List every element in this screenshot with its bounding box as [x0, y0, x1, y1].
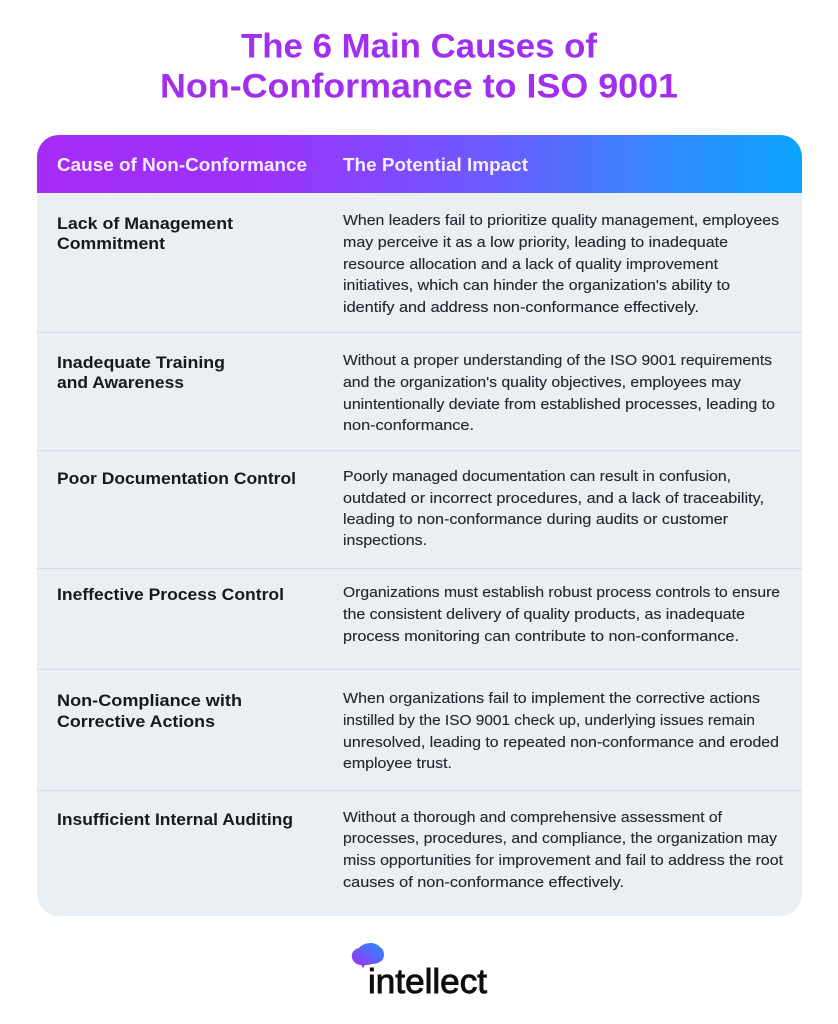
row: Non-Compliance with Corrective Actions [57, 691, 779, 772]
row: Insufficient Internal Auditing: processes, procedures, and compliance, the organization may [343, 831, 778, 847]
title: The 6 Main Causes of [241, 28, 598, 66]
row: Inadequate Training and Awareness: unintentionally deviate from established processes, leading to [343, 397, 775, 413]
table header: Cause of Non-Conformance [57, 155, 307, 175]
table header [37, 135, 802, 193]
row: Non-Compliance with Corrective Actions: unresolved, leading to repeated non-conformance and eroded [343, 735, 779, 751]
row: Insufficient Internal Auditing: causes of non-conformance effectively. [343, 875, 624, 891]
row: Ineffective Process Control: Organizations must establish robust process controls to ensure [343, 585, 780, 601]
row: Insufficient Internal Auditing: miss opportunities for improvement and fail to address the root [343, 853, 783, 869]
icon: cloud speech bubble [352, 943, 384, 968]
row: Lack of Management Commitment: initiatives, which can hinder the organization's ability to [343, 278, 730, 294]
row: Insufficient Internal Auditing: Insufficient Internal Auditing [57, 810, 293, 829]
row: Non-Compliance with Corrective Actions: When organizations fail to implement the corrective actions [343, 691, 760, 707]
row: Non-Compliance with Corrective Actions: instilled by the ISO 9001 check up, underlying issues remain [343, 713, 755, 729]
row: Lack of Management Commitment: identify and address non-conformance effectively. [343, 300, 699, 316]
logo: intellect [352, 943, 488, 1001]
row: Lack of Management Commitment [57, 213, 779, 316]
row: Insufficient Internal Auditing [57, 810, 783, 891]
row: Non-Compliance with Corrective Actions: Non-Compliance with [57, 691, 242, 710]
row: Poor Documentation Control: outdated or incorrect procedures, and a lack of traceability, [343, 491, 764, 507]
row: Insufficient Internal Auditing: Without a thorough and comprehensive assessment of [343, 810, 723, 826]
row: Lack of Management Commitment: resource allocation and a lack of quality improvement [343, 257, 718, 273]
row: Inadequate Training and Awareness: and Awareness [57, 373, 184, 392]
row: Poor Documentation Control [57, 469, 764, 549]
row: Ineffective Process Control: process monitoring can contribute to non-conformance. [343, 629, 739, 645]
table header: The Potential Impact [343, 155, 528, 175]
row: Ineffective Process Control [57, 585, 780, 645]
title: Non-Conformance to ISO 9001 [160, 68, 678, 106]
panel: table [37, 135, 802, 916]
row: Lack of Management Commitment: may perceive it as a low priority, leading to inadequate [343, 235, 728, 251]
row: Inadequate Training and Awareness: Inadequate Training [57, 353, 225, 372]
row: Poor Documentation Control: Poorly managed documentation can result in confusion, [343, 469, 731, 485]
table body background [37, 135, 802, 916]
row: Poor Documentation Control: inspections. [343, 533, 427, 549]
logo wordmark: intellect [368, 963, 488, 1001]
title [160, 28, 678, 106]
row: Inadequate Training and Awareness [57, 353, 775, 434]
row: Lack of Management Commitment: When leaders fail to prioritize quality management, employees [343, 213, 779, 229]
row: Inadequate Training and Awareness: non-conformance. [343, 418, 474, 434]
row: Inadequate Training and Awareness: and the organization's quality objectives, employees may [343, 375, 742, 391]
row: Ineffective Process Control: Ineffective Process Control [57, 585, 284, 604]
row: Non-Compliance with Corrective Actions: Corrective Actions [57, 712, 215, 731]
row: Lack of Management Commitment: Lack of Management [57, 214, 233, 233]
row: Poor Documentation Control: leading to non-conformance during audits or customer [343, 512, 728, 528]
row: Lack of Management Commitment: Commitment [57, 234, 165, 253]
row: Poor Documentation Control: Poor Documentation Control [57, 469, 296, 488]
row: Inadequate Training and Awareness: Without a proper understanding of the ISO 9001 requirements [343, 353, 772, 369]
row: Ineffective Process Control: the consistent delivery of quality products, as inadequate [343, 607, 745, 623]
row: Non-Compliance with Corrective Actions: employee trust. [343, 756, 452, 772]
